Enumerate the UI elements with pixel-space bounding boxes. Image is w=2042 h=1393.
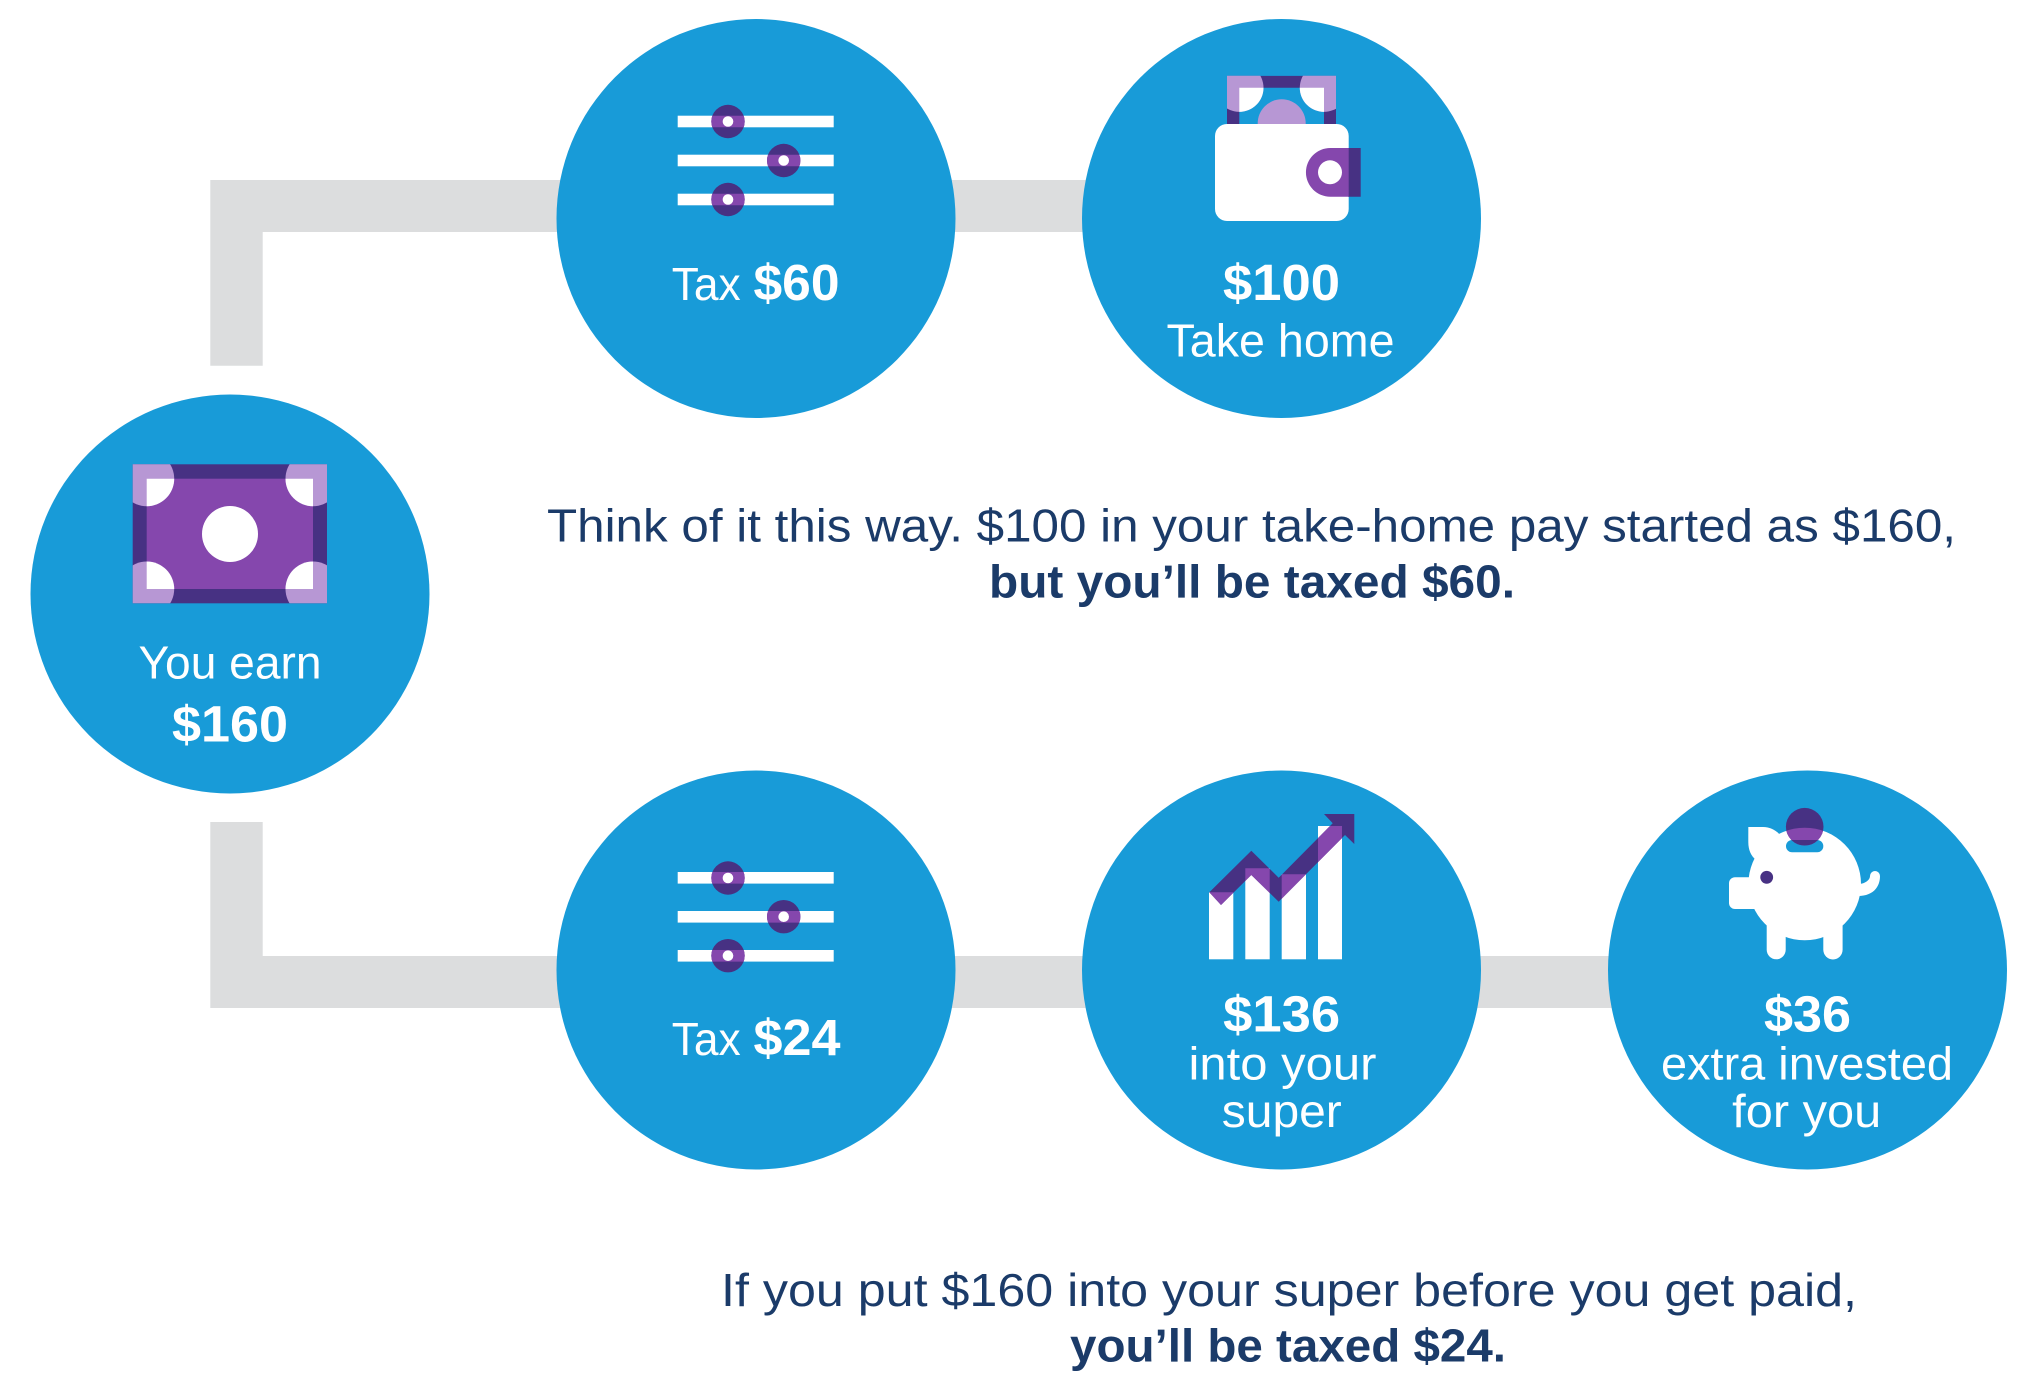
text block: super explanation: If you put $160 into your super before you get paid, <box>721 1264 1857 1316</box>
icon: banknote <box>132 464 327 604</box>
connector: top branch <box>210 180 1281 366</box>
icon: sliders <box>678 861 834 972</box>
icon: piggy bank <box>1729 808 1880 959</box>
amount: $160: $160 <box>172 696 288 753</box>
text block: take-home explanation <box>547 500 1956 608</box>
panel: tax $24 <box>556 770 956 1170</box>
icon: sliders <box>678 105 834 216</box>
label: tax $24: Tax <box>672 1013 741 1065</box>
panel: you earn <box>30 394 430 794</box>
amount: $136: $136 <box>1223 986 1340 1042</box>
panel: into your super <box>1082 770 1481 1170</box>
connector: bottom branch <box>210 822 1808 1008</box>
text block: take-home explanation: Think of it this way. $100 in your take-home pay started as $160, <box>547 500 1956 552</box>
label: extra invested: extra invested <box>1661 1038 1953 1090</box>
label: tax $24: $24 <box>754 1009 841 1066</box>
amount: $100: $100 <box>1223 254 1340 311</box>
label: for you: for you <box>1732 1085 1881 1137</box>
panel: tax $60 <box>556 19 956 418</box>
icon: growth chart <box>1209 814 1354 959</box>
label: super: super <box>1222 1085 1342 1137</box>
text block: super explanation <box>721 1264 1857 1372</box>
panel: extra invested <box>1608 770 2007 1170</box>
text block: take-home explanation: but you’ll be taxed $60. <box>989 556 1515 608</box>
label: tax $60: $60 <box>754 254 840 311</box>
label: take home: Take home <box>1166 315 1394 367</box>
label: you earn: You earn <box>138 636 322 688</box>
label: into your: into your <box>1188 1038 1376 1090</box>
icon: wallet with banknote <box>1215 63 1361 221</box>
text block: super explanation: you’ll be taxed $24. <box>1070 1320 1506 1372</box>
amount: $36: $36 <box>1764 986 1851 1042</box>
panel: take home <box>1082 19 1481 418</box>
label: tax $60: Tax <box>672 258 741 310</box>
